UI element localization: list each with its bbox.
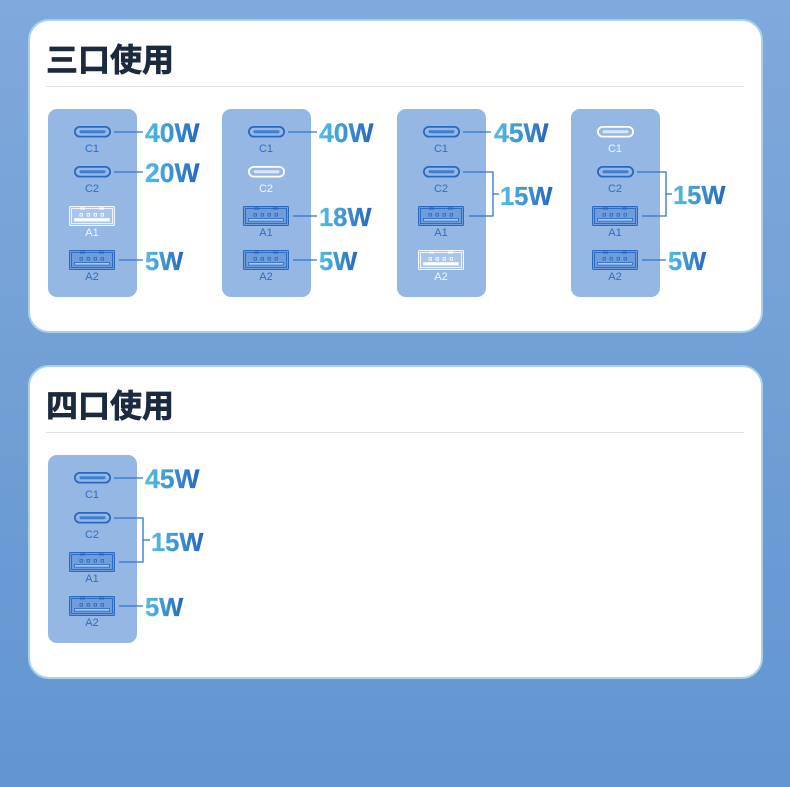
port panel 4: C2 [608, 183, 622, 195]
port panel 2: C2 [259, 183, 273, 195]
scenario 4: 15W 5W [571, 109, 726, 297]
port panel 3: C2 [434, 183, 448, 195]
wattage: C2: 20W [145, 158, 200, 188]
port panel: A1 [85, 573, 99, 585]
port panel 4: A1 [608, 227, 622, 239]
port panel 4 [571, 109, 660, 297]
port panel 1: C1 [85, 143, 99, 155]
card background [29, 20, 762, 332]
wattage: C2 and A1 shared: 15W [151, 529, 204, 557]
wattage: C1: 45W [494, 118, 548, 148]
port panel: C2 [85, 529, 99, 541]
port panel: A2 [85, 617, 99, 629]
wattage: C1: 45W [145, 464, 200, 494]
wattage: A2: 5W [319, 248, 358, 276]
port panel 2 [222, 109, 311, 297]
panel: three-port usage [29, 20, 762, 332]
wattage: A2: 5W [145, 248, 184, 276]
wattage: A2: 5W [668, 248, 707, 276]
port panel 3: C1 [434, 143, 448, 155]
wattage: C1: 40W [319, 118, 374, 148]
scenario 1: 40W 20W 5W [48, 109, 200, 297]
port panel: C1 [85, 489, 99, 501]
wattage: C2 and A1 shared: 15W [500, 183, 553, 211]
wattage: C1: 40W [145, 118, 200, 148]
port panel 2: A1 [259, 227, 273, 239]
wattage: A1: 18W [319, 204, 372, 232]
port panel 1 [48, 109, 137, 297]
port panel [48, 455, 137, 643]
wattage: C2 and A1 shared: 15W [673, 182, 726, 210]
port panel 4: A2 [608, 271, 622, 283]
port panel 1: A2 [85, 271, 99, 283]
scenario 3: 45W 15W [397, 109, 553, 297]
scenario: 45W 15W 5W [48, 455, 204, 643]
card background [29, 366, 762, 678]
scenario 2: 40W 18W 5W [222, 109, 374, 297]
port panel 1: A1 [85, 227, 99, 239]
port panel 3: A1 [434, 227, 448, 239]
wattage: A2: 5W [145, 594, 184, 622]
panel: four-port usage [29, 366, 762, 678]
port panel 3 [397, 109, 486, 297]
heading: four-port usage: 四口使用 [46, 388, 174, 424]
port panel 2: A2 [259, 271, 273, 283]
heading: three-port usage: 三口使用 [46, 42, 174, 78]
port panel 4: C1 [608, 143, 622, 155]
port panel 3: A2 [434, 271, 448, 283]
port panel 2: C1 [259, 143, 273, 155]
port panel 1: C2 [85, 183, 99, 195]
